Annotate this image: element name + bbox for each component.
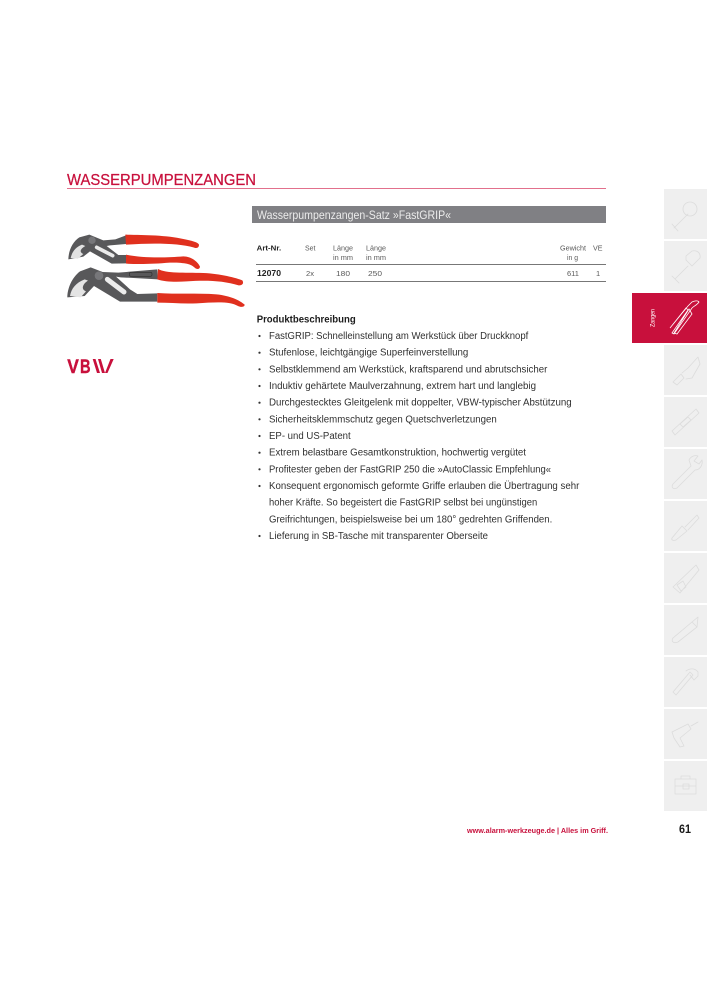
- table header: in g: [567, 253, 578, 262]
- tab: measuring wheel: [664, 189, 707, 239]
- product table: [256, 244, 606, 282]
- feature list: Durchgestecktes Gleitgelenk mit doppelter, VBW-typischer Abstützung: [269, 398, 572, 409]
- tab: cutter knife: [664, 605, 707, 655]
- feature list: Induktiv gehärtete Maulverzahnung, extrem hart und langlebig: [269, 381, 536, 392]
- tab: trowel: [664, 345, 707, 395]
- title: WASSERPUMPENZANGEN: [67, 172, 256, 189]
- table header: Art-Nr.: [257, 244, 281, 252]
- table row: [257, 269, 600, 278]
- feature list: hoher Kräfte. So begeistert die FastGRIP selbst bei ungünstigen: [269, 498, 537, 509]
- feature list: Konsequent ergonomisch geformte Griffe erlauben die Übertragung sehr: [269, 480, 580, 492]
- tab: pliers (active): [632, 293, 707, 343]
- table header: Länge: [333, 244, 353, 252]
- large pliers: [67, 267, 245, 307]
- logo: VBW: [67, 356, 114, 378]
- tab: screwdriver: [664, 501, 707, 551]
- table row: 2x: [306, 269, 314, 278]
- product description: [257, 314, 580, 542]
- footer link: www.alarm-werkzeuge.de | Alles im Griff.: [466, 826, 608, 835]
- table row: 611: [567, 269, 579, 278]
- table header: Gewicht: [560, 244, 587, 252]
- feature list: Lieferung in SB-Tasche mit transparenter Oberseite: [269, 531, 488, 542]
- tab: hammer: [664, 657, 707, 707]
- table row: 250: [368, 269, 382, 278]
- tab: drill: [664, 709, 707, 759]
- feature list: Stufenlose, leichtgängige Superfeinverstellung: [269, 348, 468, 359]
- feature list: EP- und US-Patent: [269, 431, 351, 442]
- tab: adjustable wrench: [664, 449, 707, 499]
- table row: 1: [596, 269, 600, 278]
- feature list: Profitester geben der FastGRIP 250 die »AutoClassic Empfehlung«: [269, 464, 551, 475]
- feature list: Sicherheitsklemmschutz gegen Quetschverletzungen: [269, 414, 497, 425]
- feature list: Extrem belastbare Gesamtkonstruktion, hochwertig vergütet: [269, 448, 526, 459]
- product heading bar: [252, 206, 606, 223]
- feature list: FastGRIP: Schnelleinstellung am Werkstück über Druckknopf: [269, 331, 529, 342]
- category sidebar: [632, 189, 707, 811]
- table header: Set: [305, 244, 316, 252]
- tab: spirit level: [664, 397, 707, 447]
- tab: toolbox: [664, 761, 707, 811]
- page number: 61: [679, 824, 692, 836]
- product image: pliers set: [67, 235, 245, 307]
- tab: hand saw: [664, 553, 707, 603]
- table row: 180: [336, 269, 350, 278]
- tab: pliers (active): Zangen: [650, 309, 656, 327]
- small pliers: [68, 235, 200, 269]
- feature list: Selbstklemmend am Werkstück, kraftsparend und abrutschsicher: [269, 364, 548, 375]
- table header: VE: [593, 244, 602, 252]
- logo: VBW: B: [80, 356, 91, 378]
- tab: pipe wrench: [664, 241, 707, 291]
- table header: Länge: [366, 244, 386, 252]
- feature list: Greifrichtungen, beispielsweise bei um 180° gedrehten Griffenden.: [269, 514, 552, 525]
- feature list: [258, 331, 580, 542]
- table header: [257, 244, 602, 262]
- table header: in mm: [366, 253, 386, 262]
- product heading bar: Wasserpumpenzangen-Satz »FastGRIP«: [257, 208, 451, 222]
- logo: VBW: V: [67, 356, 79, 378]
- description heading: Produktbeschreibung: [257, 314, 356, 326]
- table row: 12070: [257, 269, 282, 278]
- table header: in mm: [333, 253, 353, 262]
